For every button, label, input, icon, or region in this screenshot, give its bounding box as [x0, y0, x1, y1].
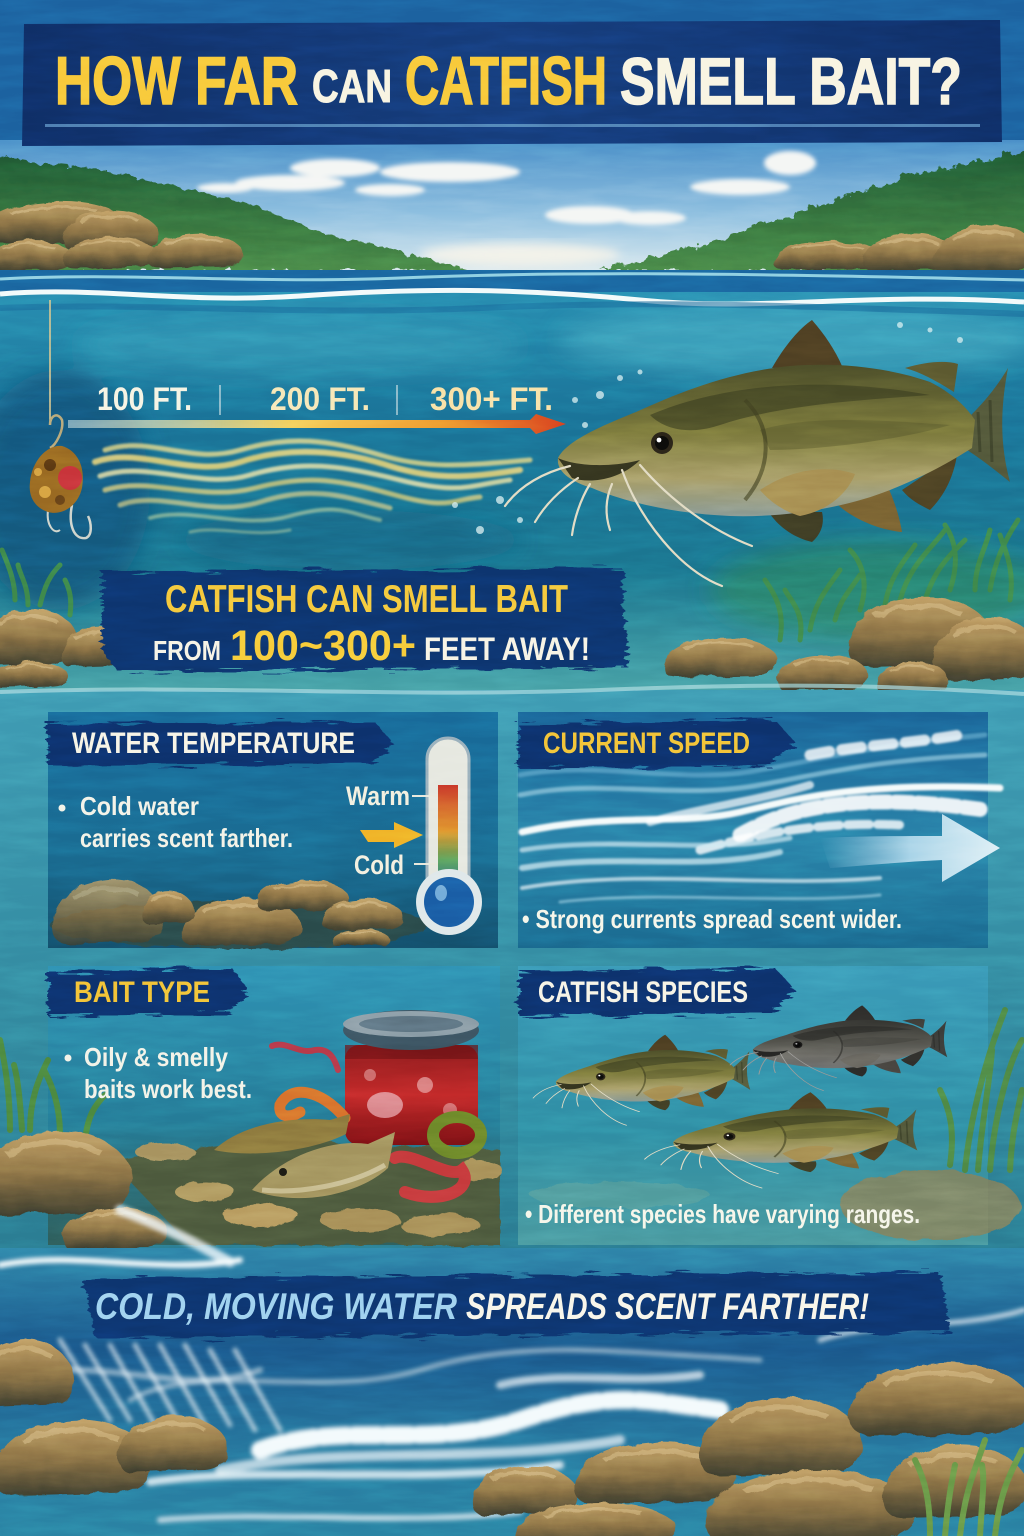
foreground plants: [915, 1440, 1022, 1536]
callout banner: range: FROM: [153, 635, 221, 666]
text: cold water: Cold water: [80, 791, 199, 821]
bait on hook: [30, 300, 91, 538]
right tree line: [600, 148, 1024, 274]
panel: current speed: [518, 712, 1000, 948]
icon: catfish two: [730, 1005, 947, 1091]
icon: yellow arrow: [360, 822, 423, 848]
panel: bait type: [0, 966, 502, 1245]
icon: current arrow: [820, 814, 1000, 882]
title banner: CATFISH: [405, 43, 607, 119]
callout banner: range: [102, 568, 628, 672]
bottom banner: SPREADS SCENT FARTHER!: [466, 1286, 869, 1327]
text: strong currents: • Strong currents spread scent wider.: [522, 904, 902, 934]
scent waves: [95, 441, 530, 533]
panel heading: catfish species: [518, 968, 795, 1016]
icon: catfish three: [645, 1092, 917, 1188]
distance scale: 100 FT.: [97, 381, 192, 417]
main catfish: [505, 320, 1010, 586]
distance scale: 200 FT.: [270, 381, 370, 417]
panel heading: water temperature: [48, 722, 392, 766]
water surface: [0, 270, 1024, 314]
bottom banner: [82, 1272, 950, 1338]
text: cold water: carries scent farther.: [80, 823, 293, 853]
text: cold water: [58, 791, 293, 853]
icon: thermometer: [412, 738, 482, 935]
panel heading: current speed: CURRENT SPEED: [543, 727, 750, 760]
divider surface line: [0, 686, 1024, 694]
right plants: [940, 1010, 1022, 1170]
panel heading: bait type: [48, 968, 248, 1016]
icon: bait jar: [343, 1010, 479, 1145]
title banner: CAN: [312, 60, 392, 112]
callout banner: range: CATFISH CAN SMELL BAIT: [165, 578, 568, 621]
left rock outcrop: [0, 1131, 168, 1250]
icon: worms: [272, 1045, 481, 1197]
current waves: [520, 735, 1000, 902]
label: warm: Warm: [346, 781, 410, 811]
panel rocks: [50, 879, 430, 949]
scent bubbles: [452, 322, 963, 534]
panel: catfish species: [518, 966, 1020, 1245]
callout banner: range: FEET AWAY!: [424, 631, 590, 667]
distance scale: [68, 381, 566, 434]
underwater background: [0, 272, 1024, 697]
text: oily baits: Oily & smelly: [84, 1042, 228, 1072]
panel: water temperature: [48, 712, 498, 949]
label: cold: Cold: [354, 850, 404, 880]
text: oily baits: [64, 1042, 252, 1104]
panel heading: water temperature: WATER TEMPERATURE: [72, 727, 355, 760]
gravel bed: [110, 1140, 502, 1245]
water light patches: [0, 304, 1024, 640]
sky scene: [0, 140, 1024, 275]
callout banner: range: 100~300+: [230, 622, 416, 670]
panel heading: catfish species: CATFISH SPECIES: [538, 976, 748, 1009]
text: species ranges: • Different species have varying ranges.: [525, 1199, 920, 1229]
shore rocks: [0, 201, 1024, 273]
top blue band: [0, 0, 1024, 160]
title banner: HOW FAR: [55, 43, 298, 119]
panel heading: current speed: [518, 720, 795, 768]
icon: catfish one: [533, 1035, 750, 1125]
bottom rapids: [0, 1210, 1024, 1536]
distance scale: 300+ FT.: [430, 381, 553, 417]
bottom banner: COLD, MOVING WATER: [95, 1286, 457, 1327]
aquatic plants and rocks: [0, 520, 1024, 693]
panel heading: bait type: BAIT TYPE: [74, 976, 210, 1009]
gravel: [530, 1170, 1020, 1240]
bottom rocks: [0, 1340, 1024, 1536]
text: oily baits: baits work best.: [84, 1074, 252, 1104]
left plants: [0, 1040, 105, 1140]
left tree line: [0, 155, 470, 272]
lower background: [0, 690, 1024, 1270]
title banner: [22, 20, 1002, 146]
icon: bait fish: [214, 1114, 395, 1198]
